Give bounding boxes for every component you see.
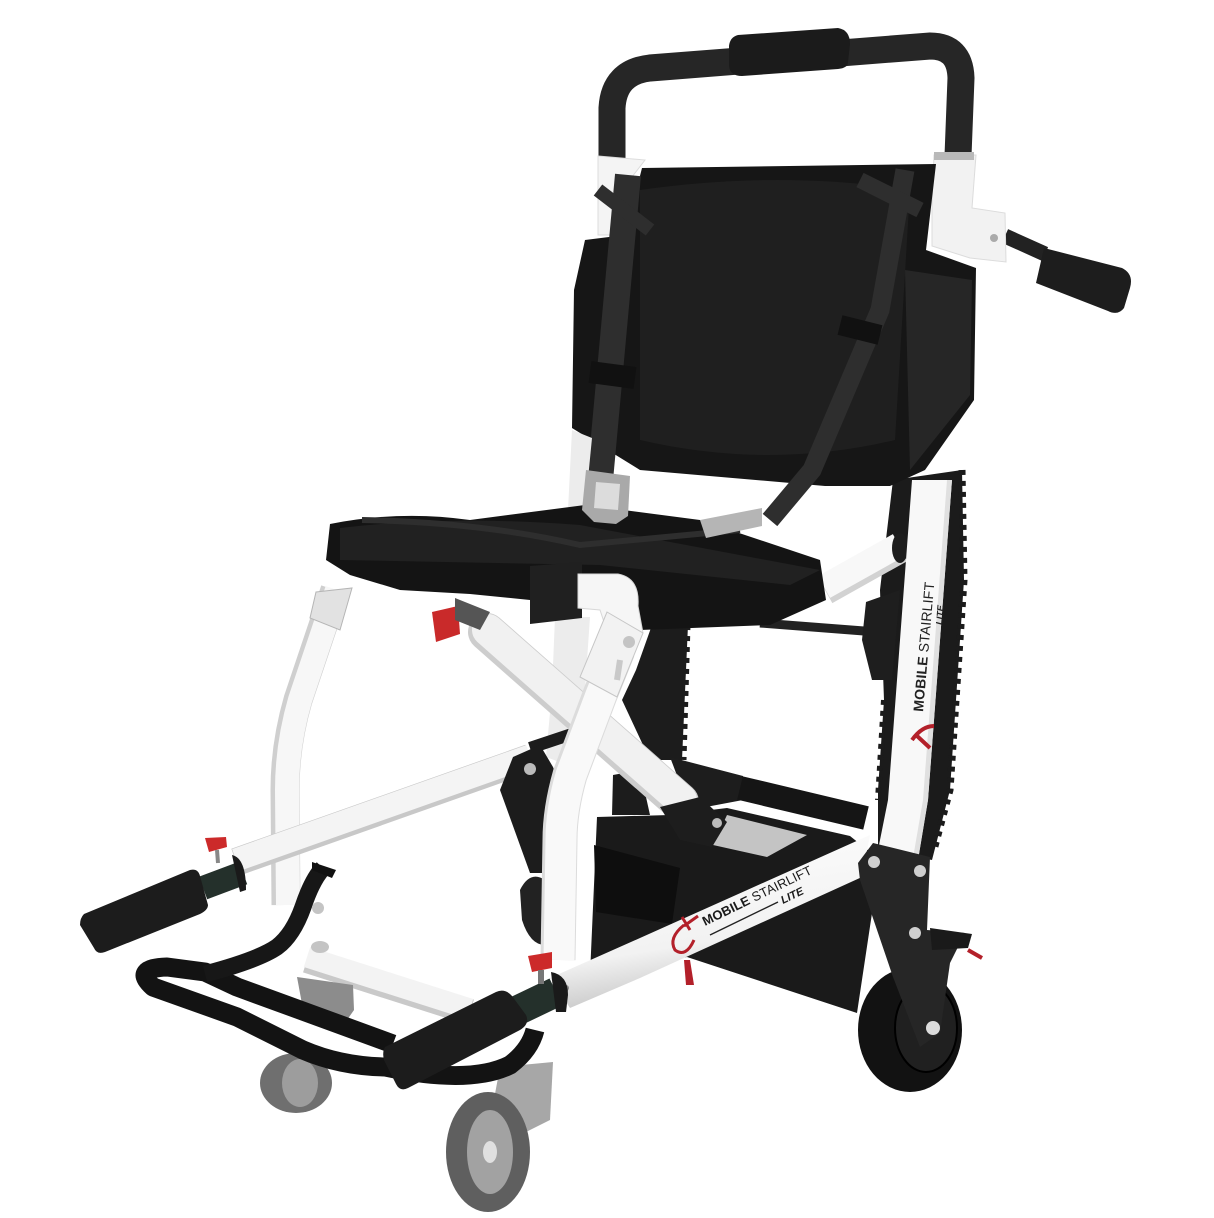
- seat cushion: [326, 505, 826, 630]
- top push handle: [612, 28, 961, 160]
- diagonal scissor brace: [487, 630, 727, 847]
- right upright white frame: [878, 480, 952, 860]
- footrest loop: [145, 967, 535, 1076]
- footrest arm: [205, 862, 336, 974]
- caster wheel front: [446, 1062, 553, 1212]
- footrest rear tube: [307, 941, 470, 1012]
- right side grip handle: [1005, 236, 1131, 313]
- upright logo: LITE: [934, 604, 946, 625]
- frame logo: LITE: [779, 885, 806, 907]
- front right leg frame: [558, 612, 643, 960]
- main diagonal white frame tube: [550, 835, 870, 1008]
- front track belt and rod: [612, 590, 900, 815]
- rear side bracket plate: [858, 843, 982, 1047]
- caster wheel rear-left: [260, 977, 354, 1113]
- lower cross tube: [236, 756, 530, 862]
- upright logo: MOBILE STAIRLIFT: [910, 581, 937, 712]
- upright logo: [910, 581, 946, 748]
- upper frame uprights: [598, 152, 1006, 262]
- left pivot bracket: [500, 745, 562, 873]
- rear cross tube: [824, 533, 908, 590]
- frame logo: [673, 863, 814, 952]
- rear track belt: [878, 470, 964, 860]
- seat back cushion: [572, 164, 976, 486]
- lower left white post behind seat: [530, 430, 592, 763]
- battery box: [520, 808, 880, 1013]
- harness straps: [590, 170, 920, 520]
- front left grip handle: [80, 837, 246, 953]
- rear wheel: [858, 968, 962, 1092]
- seat belt buckles: [582, 470, 762, 538]
- front seat frame tube: [530, 562, 643, 640]
- front left leg frame: [285, 588, 352, 905]
- red release latch: [432, 598, 490, 642]
- front right grip handle: [383, 952, 568, 1089]
- frame logo: MOBILE STAIRLIFT: [700, 863, 814, 929]
- rear lower rod: [670, 757, 866, 818]
